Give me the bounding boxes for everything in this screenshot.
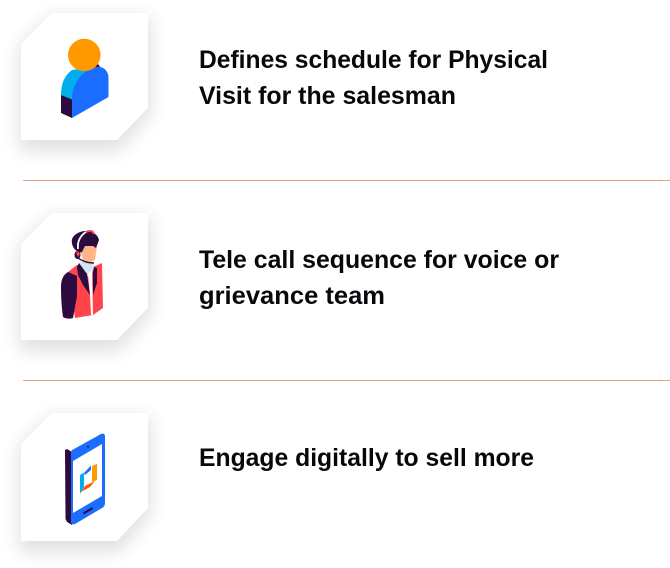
text: tele call description xyxy=(199,246,559,310)
text: schedule description: Defines schedule for Physical xyxy=(199,46,548,74)
card: digital icon tile xyxy=(19,413,151,552)
text: tele call description: grievance team xyxy=(199,282,385,310)
card: tele call icon tile xyxy=(19,213,151,351)
text: digital engagement description: Engage digitally to sell more xyxy=(199,444,534,472)
panel: tele call row xyxy=(19,213,559,351)
panel: digital engagement row xyxy=(19,413,534,552)
icon: person xyxy=(61,39,108,118)
text: schedule description: Visit for the salesman xyxy=(199,82,456,110)
text: tele call description: Tele call sequence for voice or xyxy=(199,246,559,274)
icon: app logo xyxy=(80,464,97,494)
icon: smartphone xyxy=(65,434,105,525)
panel: schedule row xyxy=(19,13,548,151)
text: schedule description xyxy=(199,46,548,110)
icon: call agent with headset xyxy=(61,231,103,319)
card: schedule icon tile xyxy=(19,13,151,151)
